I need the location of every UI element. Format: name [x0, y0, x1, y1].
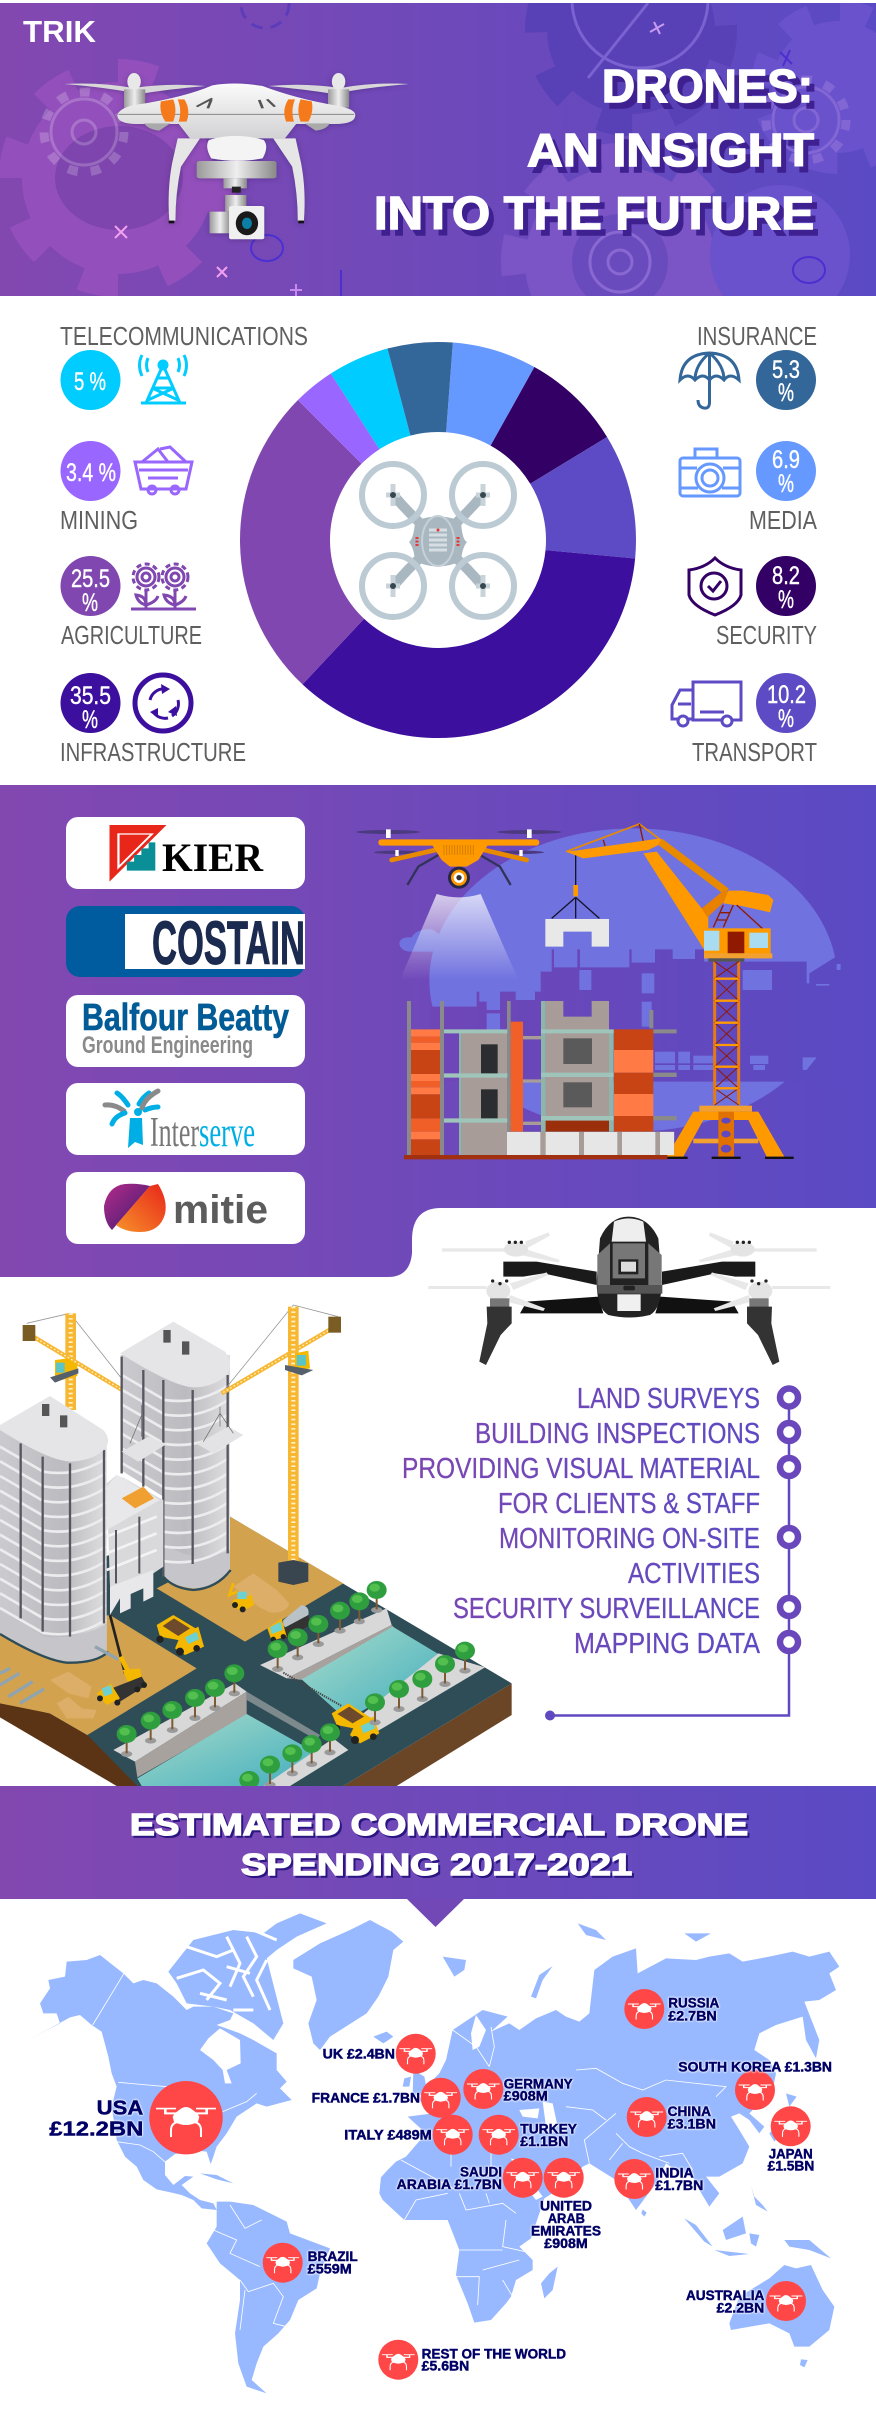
- item: agriculture: [60, 556, 202, 650]
- tower block, front: [0, 1396, 231, 1663]
- item: insurance: INSURANCE: [697, 321, 817, 351]
- decorative gears: [0, 3, 876, 296]
- label and marker: India: £1.7BN: [655, 2178, 703, 2193]
- item: agriculture: 25.5: [71, 565, 110, 593]
- list: drone uses in construction: MAPPING DATA: [574, 1628, 761, 1660]
- label and marker: Australia: £2.2BN: [717, 2300, 764, 2315]
- label and marker: Saudi Arabia: ARABIA £1.7BN: [397, 2177, 502, 2192]
- tower block, rear: [120, 1322, 230, 1588]
- segment: infrastructure 35.5%: [302, 550, 635, 738]
- label and marker: Rest of the world: [378, 2340, 566, 2380]
- list: drone uses in construction: FOR CLIENTS & STAFF: [498, 1488, 760, 1520]
- excavator: [229, 1583, 254, 1612]
- label and marker: United Arab Emirates: UNITED: [540, 2199, 592, 2214]
- truck: tipper by bridge: [332, 1703, 379, 1744]
- list: drone uses in construction: LAND SURVEYS: [577, 1383, 760, 1415]
- heading: [130, 1807, 748, 1882]
- panel: industry share donut: [60, 321, 818, 767]
- pipes: [0, 1647, 118, 1703]
- label and marker: USA: USA: [97, 2097, 143, 2119]
- panel: spending heading: [0, 1786, 876, 1927]
- item: security: [689, 556, 817, 650]
- label and marker: France: [312, 2078, 461, 2118]
- pointer: [407, 1899, 464, 1927]
- logo card: Costain: [66, 906, 305, 977]
- label and marker: Brazil: BRAZIL: [308, 2249, 358, 2264]
- list: drone uses in construction: BUILDING INSPECTIONS: [475, 1418, 760, 1450]
- item: insurance: [680, 321, 817, 410]
- label and marker: France: FRANCE £1.7BN: [312, 2090, 420, 2105]
- item: security: 8.2: [772, 562, 800, 590]
- label and marker: UK: UK £2.4BN: [323, 2046, 395, 2061]
- illustration: drone over construction site with crane: [356, 824, 841, 1159]
- left half: [428, 1232, 603, 1365]
- heading: SPENDING 2017-2021: [241, 1847, 632, 1882]
- icon: black and white camera drone: [428, 1217, 830, 1365]
- item: media: 6.9: [772, 446, 800, 474]
- item: transport: %: [778, 705, 794, 733]
- list: drone uses in construction: MONITORING ON-SITE: [499, 1523, 760, 1555]
- label and marker: Russia: [624, 1989, 720, 2029]
- item: insurance: %: [778, 379, 794, 407]
- logo card: Balfour Beatty: Ground Engineering: [82, 1032, 253, 1059]
- item: transport: TRANSPORT: [692, 737, 817, 767]
- label and marker: Russia: £2.7BN: [668, 2008, 717, 2023]
- logo card: Balfour Beatty: Balfour Beatty: [82, 997, 289, 1039]
- list: drone uses in construction: ACTIVITIES: [628, 1558, 760, 1590]
- segment: media 6.9%: [446, 343, 534, 446]
- sand piles: [50, 1573, 289, 1718]
- heading: ESTIMATED COMMERCIAL DRONE: [130, 1807, 748, 1842]
- label and marker: Saudi Arabia: [397, 2158, 543, 2198]
- label and marker: China: CHINA: [668, 2104, 711, 2119]
- label and marker: Japan: JAPAN: [769, 2146, 813, 2161]
- building under construction: [404, 1001, 677, 1159]
- item: media: MEDIA: [749, 505, 818, 535]
- logo card: Balfour Beatty: [66, 995, 305, 1067]
- truck: tipper: [156, 1615, 204, 1656]
- label and marker: Germany: GERMANY: [504, 2076, 573, 2091]
- label and marker: Turkey: £1.1BN: [520, 2134, 568, 2149]
- label and marker: Japan: [768, 2106, 814, 2174]
- scan light cone: [400, 894, 518, 980]
- icon: top-down drone in donut centre: [362, 464, 514, 617]
- label and marker: South Korea: [678, 2059, 832, 2110]
- label and marker: United Arab Emirates: £908M: [544, 2236, 588, 2251]
- label and marker: Japan: £1.5BN: [768, 2159, 814, 2174]
- label and marker: USA: [49, 2081, 223, 2154]
- logo card: Costain: COSTAIN: [152, 909, 305, 977]
- Eurasia, Africa and Oceania: [376, 1923, 839, 2367]
- title: INTO THE FUTURE: [374, 187, 814, 239]
- segment: telecommunications 5%: [331, 349, 410, 449]
- item: transport: 10.2: [767, 681, 806, 709]
- title: [374, 60, 814, 239]
- label and marker: South Korea: SOUTH KOREA £1.3BN: [678, 2059, 832, 2074]
- segment: mining 3.4%: [298, 374, 380, 464]
- title: AN INSIGHT: [527, 124, 814, 176]
- item: insurance: 5.3: [772, 356, 800, 384]
- label and marker: USA: £12.2BN: [49, 2118, 143, 2140]
- label and marker: Germany: £908M: [504, 2088, 548, 2103]
- logo card: Mitie: mitie: [173, 1188, 268, 1232]
- illustration: isometric construction site: [0, 1305, 512, 1803]
- donut chart: [240, 342, 636, 738]
- ground and soil: [0, 1517, 512, 1786]
- truck: cement mixer: [267, 1605, 310, 1642]
- item: mining: [60, 441, 192, 535]
- mobile crane: [97, 1615, 147, 1706]
- crane, left: [23, 1313, 142, 1410]
- item: infrastructure: 35.5: [70, 682, 111, 710]
- timeline connector with bullets: [545, 1388, 798, 1720]
- item: infrastructure: [60, 673, 246, 767]
- label and marker: United Arab Emirates: ARAB: [548, 2211, 585, 2226]
- label and marker: United Arab Emirates: EMIRATES: [531, 2223, 601, 2238]
- item: agriculture: %: [82, 589, 98, 617]
- title: DRONES:: [602, 60, 813, 112]
- item: infrastructure: %: [82, 706, 98, 734]
- icon: white quadcopter with camera: [64, 73, 409, 239]
- label and marker: Australia: AUSTRALIA: [686, 2288, 765, 2303]
- segment: insurance 5.3%: [387, 342, 453, 436]
- logo card: Interserve: [66, 1083, 305, 1156]
- label and marker: Saudi Arabia: SAUDI: [460, 2165, 502, 2180]
- label and marker: Turkey: TURKEY: [520, 2121, 577, 2136]
- icon: truck: [672, 682, 741, 726]
- brand: TRIK: TRIK: [23, 14, 97, 49]
- world map: [29, 1913, 839, 2393]
- segment: agriculture 25.5%: [240, 400, 364, 684]
- trees: [117, 1581, 475, 1803]
- icon: camera: [680, 449, 740, 496]
- label and marker: India: [614, 2159, 703, 2199]
- logo card: Kier: KIER: [162, 835, 264, 880]
- item: transport: [672, 673, 817, 767]
- item: agriculture: AGRICULTURE: [61, 620, 202, 650]
- label and marker: China: £3.1BN: [668, 2116, 716, 2131]
- label and marker: Rest of the world: £5.6BN: [422, 2359, 469, 2374]
- label and marker: India: INDIA: [655, 2166, 694, 2181]
- item: security: %: [778, 586, 794, 614]
- item: mining: 3.4 %: [66, 459, 116, 487]
- icon: umbrella: [680, 353, 739, 408]
- item: media: [680, 441, 818, 535]
- list: drone uses in construction: SECURITY SURVEILLANCE: [453, 1593, 760, 1625]
- panel: header banner: [0, 3, 876, 296]
- label and marker: Italy: ITALY £489M: [344, 2127, 432, 2142]
- icon: flowers: [131, 564, 196, 609]
- segment: security 8.2%: [491, 367, 607, 484]
- crane: [566, 824, 794, 1159]
- label and marker: Brazil: £559M: [308, 2261, 352, 2276]
- logo card: Kier: [66, 817, 305, 889]
- label and marker: China: [627, 2097, 716, 2137]
- logo card: Interserve: Inter: [150, 1110, 199, 1156]
- crane, right: [122, 1305, 341, 1585]
- label and marker: Brazil: [263, 2243, 358, 2283]
- icon: cycle arrows: [135, 675, 191, 731]
- list: drone uses in construction: [402, 1383, 798, 1720]
- label and marker: Australia: [686, 2281, 806, 2321]
- suspended concrete block: [545, 853, 609, 947]
- label and marker: Germany: [463, 2069, 573, 2109]
- label and marker: Turkey: [479, 2115, 577, 2155]
- item: media: %: [778, 470, 794, 498]
- icon: mine cart: [135, 447, 192, 494]
- label and marker: United Arab Emirates: [531, 2158, 601, 2251]
- logo card: Mitie: [66, 1172, 305, 1244]
- logo card: Interserve: serve: [199, 1110, 255, 1156]
- list: drone uses in construction: PROVIDING VISUAL MATERIAL: [402, 1453, 760, 1485]
- connecting block: [107, 1475, 163, 1615]
- icon: shield: [689, 558, 741, 615]
- city skyline: [430, 949, 839, 1082]
- label and marker: Italy: [344, 2115, 473, 2155]
- icon: radio tower: [140, 355, 186, 403]
- item: telecommunications: 5 %: [74, 368, 106, 396]
- label and marker: Rest of the world: REST OF THE WORLD: [422, 2346, 566, 2361]
- orange survey drone: [356, 829, 561, 889]
- segment: transport 10.2%: [530, 437, 636, 559]
- item: mining: MINING: [60, 505, 138, 535]
- label and marker: UK: [323, 2034, 436, 2074]
- item: security: SECURITY: [716, 620, 817, 650]
- item: telecommunications: TELECOMMUNICATIONS: [60, 321, 308, 351]
- panel: construction companies: [0, 785, 876, 1277]
- label and marker: Russia: RUSSIA: [668, 1996, 720, 2011]
- item: telecommunications: [60, 321, 308, 410]
- item: infrastructure: INFRASTRUCTURE: [60, 737, 246, 767]
- Americas and Greenland: [29, 1913, 403, 2393]
